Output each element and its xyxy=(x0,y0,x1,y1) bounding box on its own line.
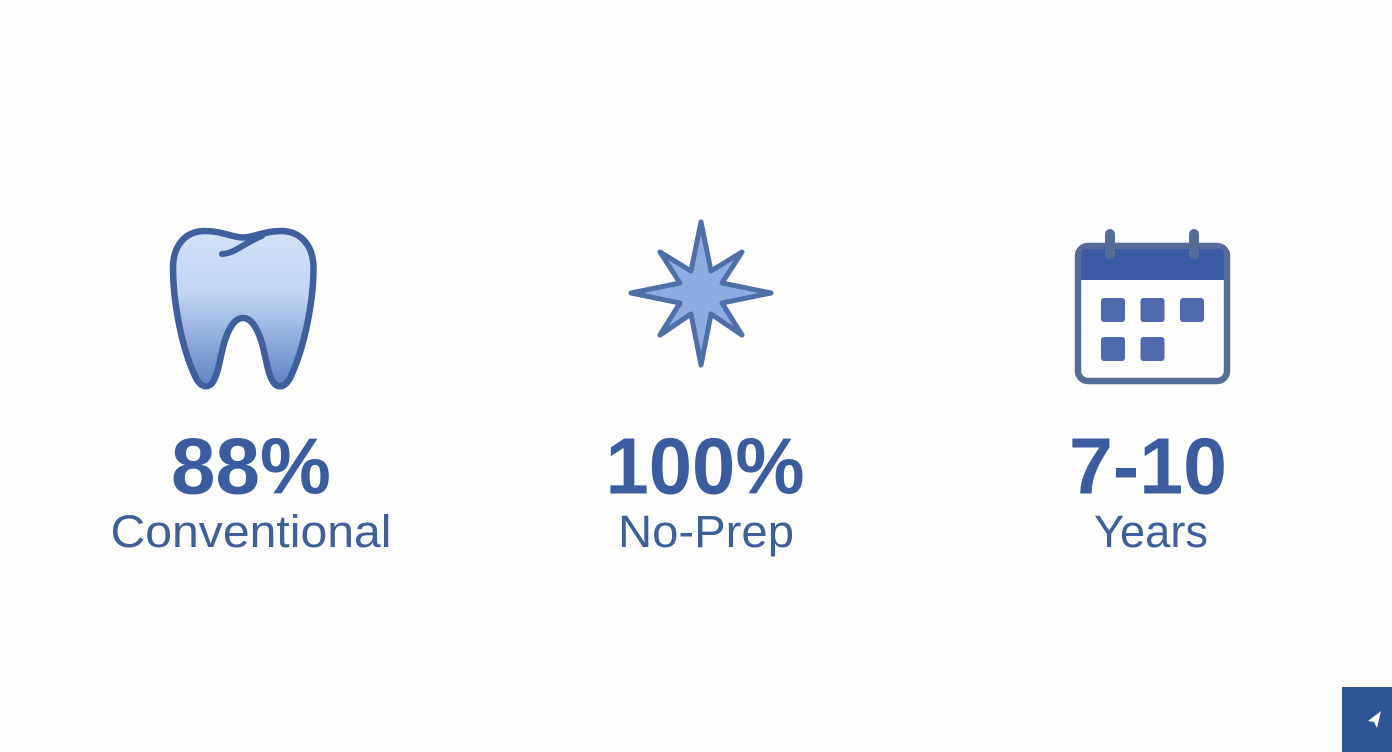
stat value: 7-10: 7-10 xyxy=(1069,422,1227,510)
icon: calendar xyxy=(1078,229,1227,381)
stat label: Conventional: Conventional xyxy=(110,506,392,557)
stat: no-prep xyxy=(606,222,804,557)
icon: tooth xyxy=(173,231,314,386)
stat: conventional xyxy=(110,231,392,557)
stat value: 88%: 88% xyxy=(171,422,331,510)
icon: eight-point star xyxy=(631,222,771,365)
stat: years xyxy=(1069,229,1227,557)
stat label: Years: Years xyxy=(1094,506,1208,557)
stat value: 100%: 100% xyxy=(606,422,804,510)
stat label: No-Prep: No-Prep xyxy=(618,506,794,557)
icon: navigation arrow xyxy=(1368,711,1381,728)
corner badge xyxy=(1342,687,1392,752)
